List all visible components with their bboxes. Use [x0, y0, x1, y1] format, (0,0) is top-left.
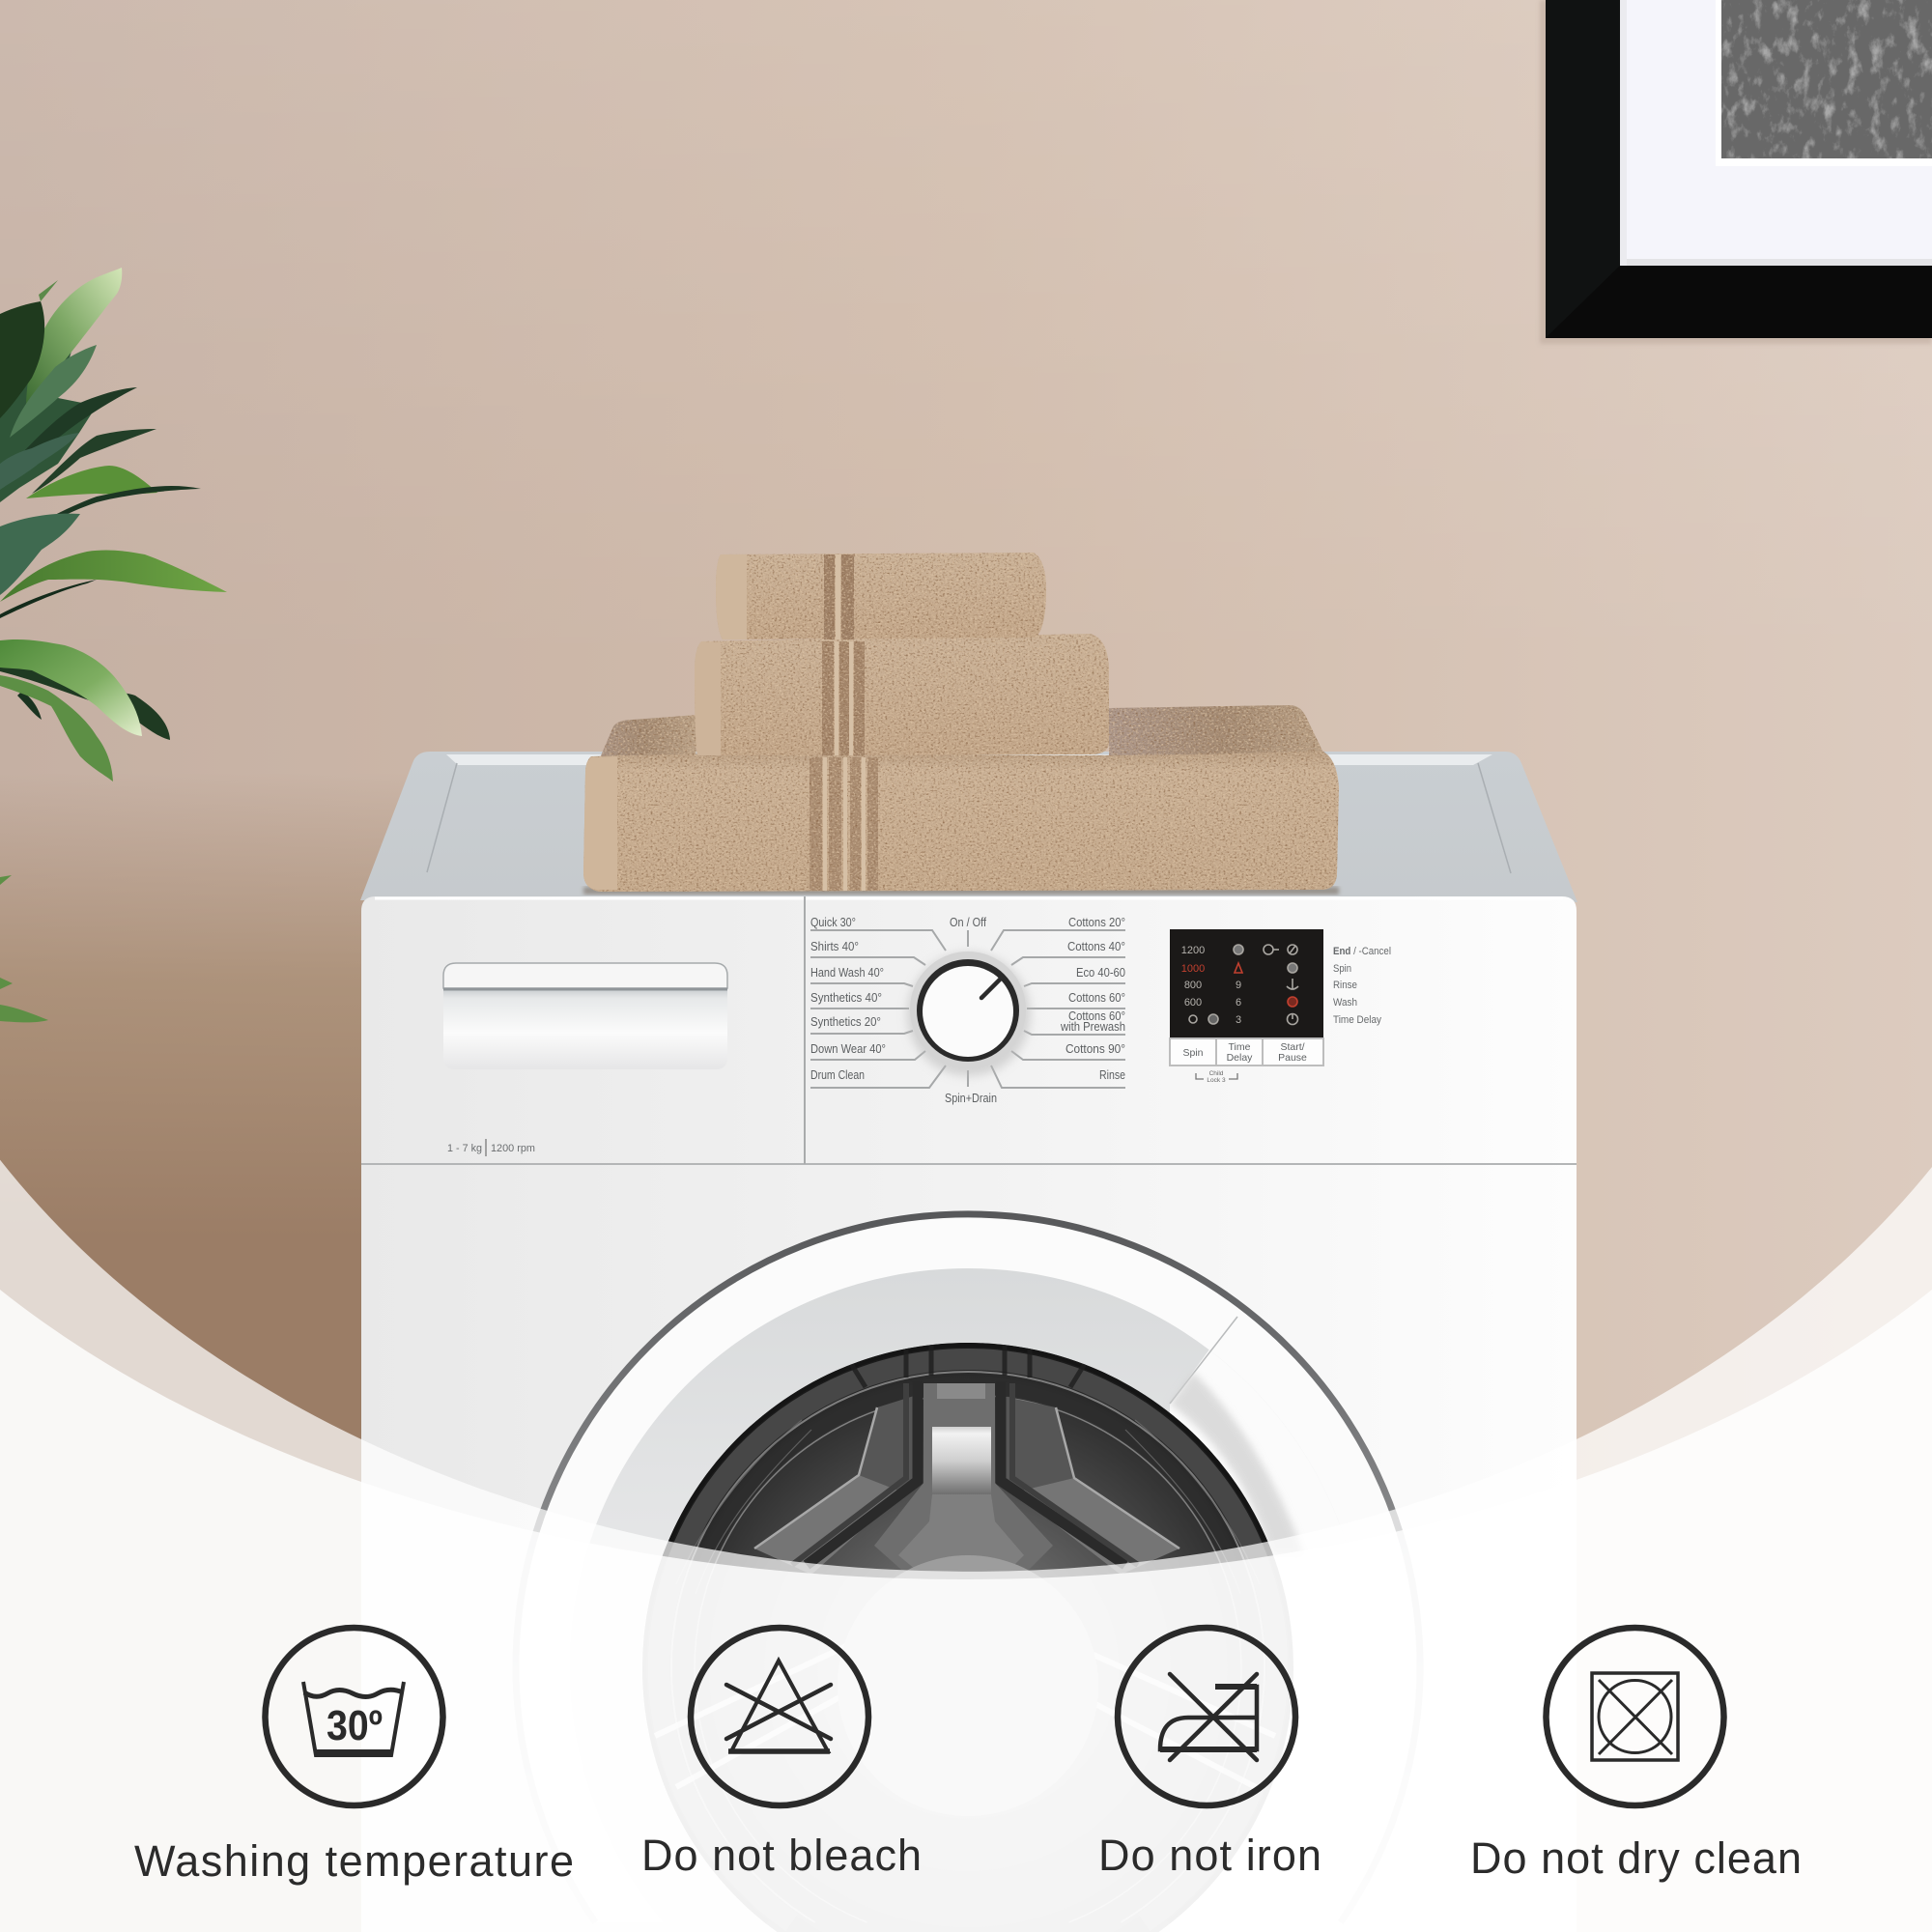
- status list: Spin: [1333, 963, 1351, 975]
- status list: Rinse: [1333, 980, 1357, 991]
- program labels: with Prewash: [1060, 1019, 1125, 1034]
- program labels: On / Off: [950, 915, 986, 929]
- drum interior: [642, 1343, 1293, 1932]
- care item: do not dry clean: [1470, 1628, 1802, 1883]
- plant leaves: [0, 268, 227, 1022]
- washcloth: [716, 553, 1046, 639]
- washing machine: [360, 752, 1577, 1932]
- label: Do not bleach: [641, 1831, 922, 1880]
- status list: End / -Cancel: [1333, 946, 1391, 957]
- care item: washing temperature: [134, 1628, 574, 1886]
- label: Do not dry clean: [1470, 1833, 1802, 1883]
- program labels: Quick 30°: [810, 915, 856, 929]
- program labels: Shirts 40°: [810, 939, 859, 953]
- display buttons: [1170, 1038, 1323, 1065]
- label: Do not iron: [1098, 1831, 1321, 1880]
- program labels: Cottons 60°: [1068, 990, 1125, 1005]
- detergent drawer: [443, 963, 727, 1069]
- care item: do not bleach: [641, 1628, 922, 1880]
- capacity label: [447, 1139, 535, 1156]
- status list: Wash: [1333, 997, 1357, 1009]
- care item: do not iron: [1098, 1628, 1321, 1880]
- child lock label: Lock 3: [1207, 1077, 1226, 1084]
- white curved base: [0, 1290, 1932, 1932]
- icon: crossed triangle: [691, 1628, 868, 1805]
- icon: crossed tumble square: [1546, 1628, 1723, 1805]
- display buttons: Spin: [1182, 1047, 1204, 1059]
- drum lower half: [654, 1555, 1260, 1783]
- program labels: Cottons 60°: [1068, 1009, 1125, 1023]
- selector knob: [907, 952, 1031, 1076]
- program labels: Cottons 90°: [1065, 1041, 1125, 1056]
- display buttons: Pause: [1278, 1052, 1307, 1064]
- framed artwork: [1721, 0, 1932, 158]
- program labels: Eco 40-60: [1076, 965, 1125, 980]
- label: Washing temperature: [134, 1836, 574, 1886]
- program labels: Spin+Drain: [945, 1091, 997, 1105]
- icon: crossed iron: [1118, 1628, 1295, 1805]
- digital display: 6: [1236, 997, 1241, 1009]
- translucent curved band: [0, 1160, 1932, 1932]
- display buttons: Time: [1229, 1041, 1251, 1053]
- digital display: 1000: [1181, 963, 1205, 975]
- status list: Time Delay: [1333, 1014, 1381, 1026]
- digital display: 3: [1236, 1014, 1241, 1026]
- program labels: Drum Clean: [810, 1067, 865, 1082]
- digital display: 800: [1184, 980, 1202, 991]
- program labels: Hand Wash 40°: [810, 965, 884, 980]
- program labels: Rinse: [1099, 1067, 1125, 1082]
- capacity label: 1 - 7 kg: [447, 1143, 482, 1154]
- digital display: 1200: [1181, 945, 1205, 956]
- program labels: Down Wear 40°: [810, 1041, 886, 1056]
- picture frame: [1540, 0, 1932, 344]
- machine body: [361, 896, 1577, 1932]
- icon: wash tub 30 degrees: 30º: [327, 1702, 383, 1749]
- child lock label: [1196, 1070, 1237, 1084]
- digital display: [1170, 929, 1323, 1038]
- capacity label: 1200 rpm: [491, 1143, 535, 1154]
- display buttons: Start/: [1280, 1041, 1305, 1053]
- program labels: Cottons 40°: [1067, 939, 1125, 953]
- program selector lines: [810, 930, 1125, 1088]
- program labels: [810, 915, 1125, 1105]
- door: [533, 1210, 1403, 1542]
- hand towel: [695, 634, 1109, 755]
- display buttons: Delay: [1227, 1052, 1253, 1064]
- status list: [1333, 946, 1391, 1026]
- bath towel: [583, 705, 1339, 892]
- program labels: Cottons 20°: [1068, 915, 1125, 929]
- icon: wash tub 30 degrees: [265, 1628, 442, 1805]
- digital display: 600: [1184, 997, 1202, 1009]
- towel stack: [583, 553, 1339, 895]
- child lock label: Child: [1209, 1070, 1224, 1077]
- digital display: 9: [1236, 980, 1241, 991]
- machine top surface: [360, 752, 1577, 902]
- program labels: Synthetics 20°: [810, 1014, 881, 1029]
- program labels: Synthetics 40°: [810, 990, 882, 1005]
